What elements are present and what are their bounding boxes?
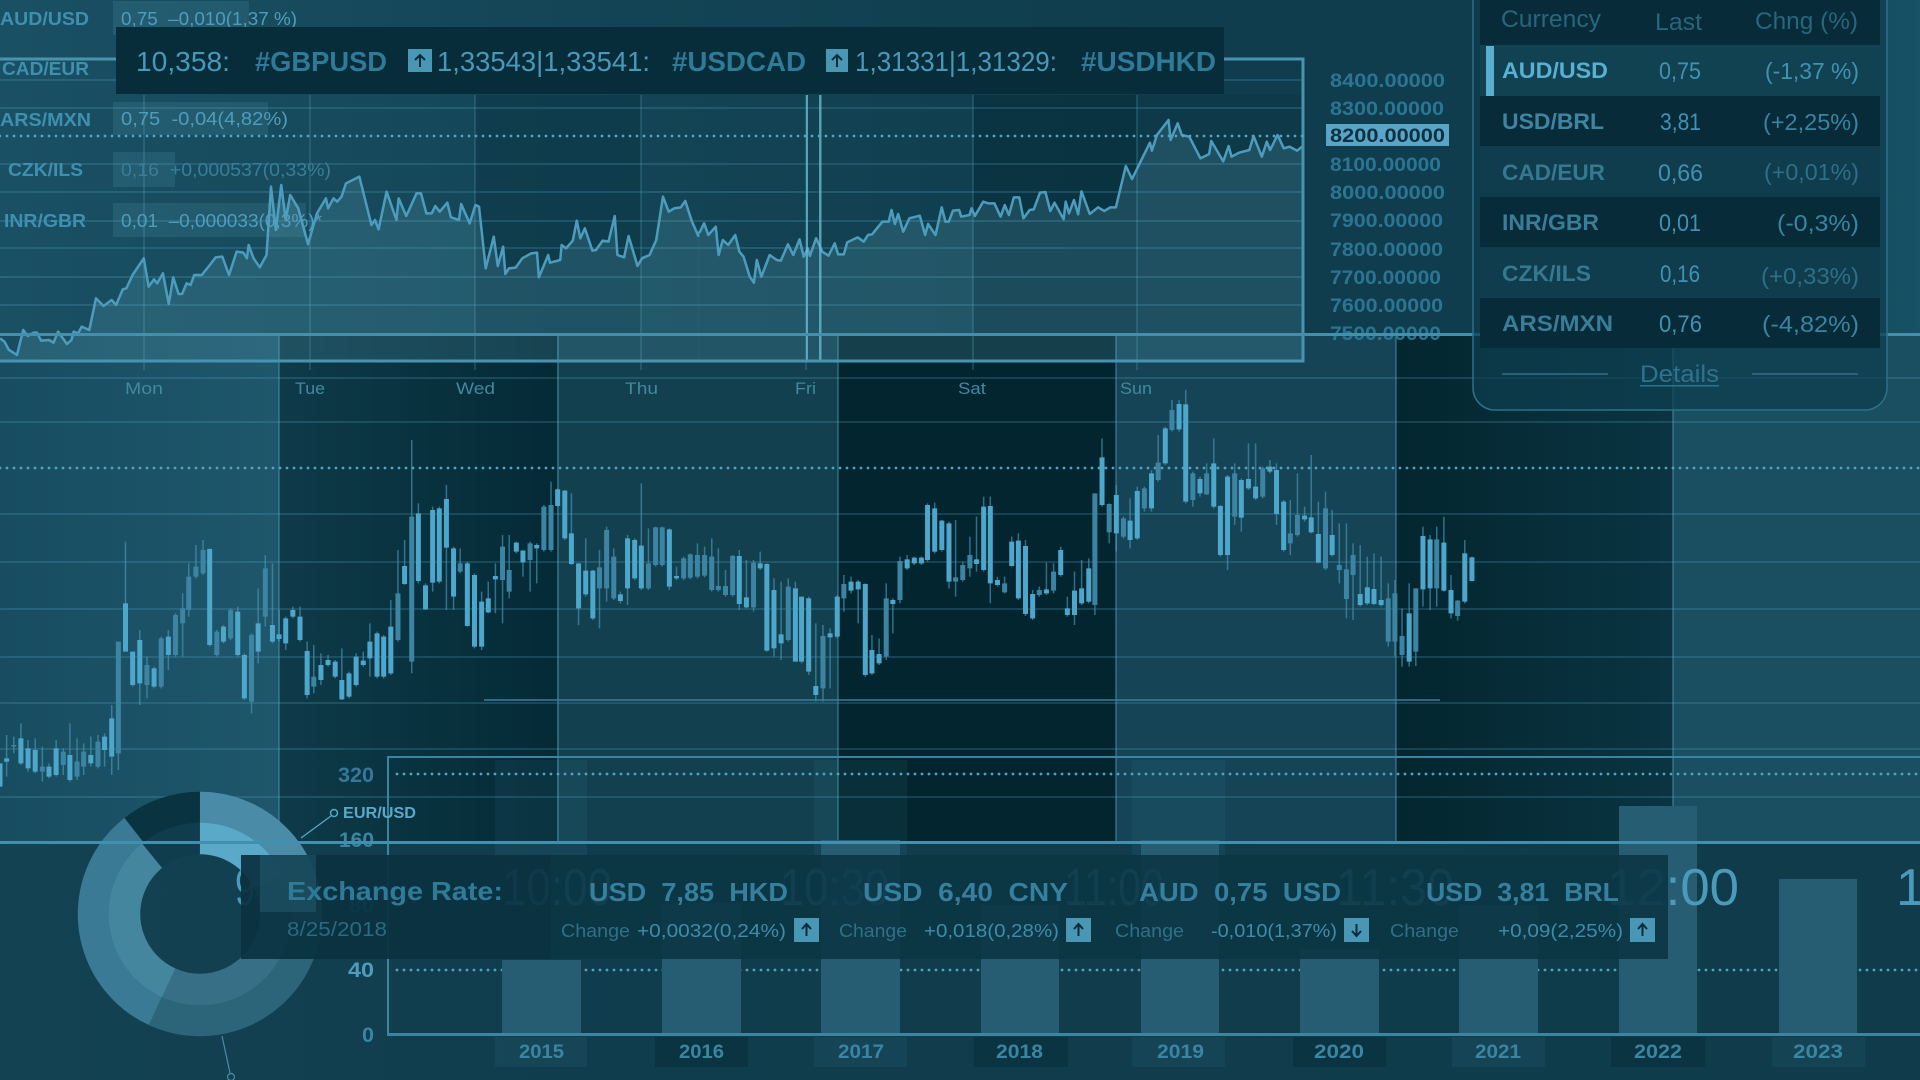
bar chart y axis: 320 [338, 764, 374, 787]
rate: AUD USD [1115, 877, 1369, 942]
y axis labels: line chart: 7900.00000 [1330, 210, 1443, 232]
ticker bar: 1,31331|1,31329: [855, 46, 1057, 77]
bar chart year labels: 2019 [1157, 1042, 1204, 1063]
day axis labels: Sun [1120, 379, 1152, 398]
day axis labels: Fri [795, 379, 816, 398]
rate: USD CNY: Change [839, 921, 907, 941]
exchange rate panel [241, 855, 1668, 959]
day axis labels [125, 379, 1152, 398]
rate: AUD USD: AUD 0,75 USD [1139, 877, 1341, 907]
rate: USD BRL: +0,09(2,25%) [1498, 921, 1623, 941]
rate: USD BRL: Change [1390, 921, 1459, 941]
left currency quote list: 0,75 -0,04(4,82%) [121, 108, 288, 129]
row: INR/GBR: 0,01 [1659, 210, 1701, 237]
bar chart year labels: 2018 [996, 1042, 1043, 1063]
ticker bar: 10,358: [136, 46, 230, 77]
ticker bar: #USDCAD [672, 46, 806, 77]
left currency quote list: CAD/EUR [2, 58, 89, 79]
icon: up arrow [826, 49, 848, 72]
rate: USD HKD: USD 7,85 HKD [589, 877, 788, 907]
ticker bar [116, 27, 1224, 94]
rate: USD BRL [1390, 877, 1655, 942]
row: CZK/ILS: 0,16 [1660, 261, 1700, 288]
ghost time axis labels: 11:00 [1064, 859, 1164, 917]
donut label: EUR/USD [301, 805, 416, 838]
row: AUD/USD [1502, 58, 1859, 85]
row: ARS/MXN [1502, 311, 1859, 338]
rate: USD HKD: +0,0032(0,24%) [637, 921, 786, 941]
left currency quote list: 0,75 –0,010(1,37 %) [121, 8, 297, 29]
bar chart [338, 757, 1920, 1067]
ghost time axis labels [235, 859, 1920, 917]
bar chart y axis: 0 [362, 1024, 374, 1047]
row: USD/BRL: 3,81 [1660, 109, 1701, 136]
bar chart y axis: 160 [339, 829, 374, 852]
horizontal rules [0, 333, 1920, 844]
faint bar shadows in bar chart [495, 760, 1865, 1067]
table rows [1480, 0, 1880, 348]
day axis labels: Tue [295, 379, 325, 398]
candlestick baseline [484, 699, 1440, 701]
rate: USD HKD [561, 877, 819, 942]
line chart: weekly rate [0, 120, 1303, 361]
row: CZK/ILS: (+0,33%) [1761, 263, 1859, 289]
panel: currency table [1473, 0, 1887, 410]
left currency quote list: CZK/ILS [8, 159, 83, 180]
left currency quote list: AUD/USD [0, 8, 89, 29]
bar chart year labels: 2021 [1475, 1042, 1521, 1063]
bar chart year labels: 2015 [519, 1042, 564, 1063]
row: CZK/ILS [1502, 261, 1859, 289]
line chart cursor [806, 95, 822, 360]
bar chart year labels [519, 1037, 1843, 1067]
left currency quote list: 0,01 –0,000033(0,3%)* [121, 210, 322, 231]
row: INR/GBR: (-0,3%) [1777, 210, 1859, 236]
rate: USD HKD: Change [561, 921, 630, 941]
donut lower leader [222, 1036, 234, 1080]
dotted reference lines [0, 136, 1920, 970]
day axis labels: Sat [958, 379, 986, 398]
left currency quote list: ARS/MXN [0, 109, 91, 130]
bar chart y axis [338, 764, 374, 1047]
y axis labels: line chart: 8400.00000 [1330, 70, 1445, 92]
ticker bar: #GBPUSD [255, 46, 387, 77]
row: INR/GBR [1502, 210, 1859, 237]
rate: USD BRL: USD 3,81 BRL [1426, 877, 1619, 907]
row: ARS/MXN: (-4,82%) [1762, 311, 1859, 337]
day axis labels: Thu [625, 379, 658, 398]
rate: AUD USD: Change [1115, 921, 1184, 941]
ticker bar: #USDHKD [1081, 46, 1216, 77]
ghost time axis labels: 10:30 [780, 859, 889, 917]
ghost time axis labels: 9 [235, 859, 255, 917]
ghost time axis labels: 10:00 [502, 859, 612, 917]
row: USD/BRL: USD/BRL [1502, 109, 1604, 134]
y axis labels: line chart [1326, 70, 1449, 345]
row: CAD/EUR: 0,66 [1658, 160, 1703, 187]
row: ARS/MXN: ARS/MXN [1502, 311, 1613, 336]
candlestick chart [0, 390, 1472, 787]
ghost time axis labels: 11:30 [1336, 859, 1454, 917]
rate: USD CNY: +0,018(0,28%) [924, 921, 1059, 941]
y axis labels: line chart: 8200.00000 [1330, 125, 1445, 147]
left currency quote list: INR/GBR [4, 210, 86, 231]
left currency quote list [0, 1, 331, 237]
row: CAD/EUR: CAD/EUR [1502, 160, 1605, 185]
table header [1501, 6, 1858, 36]
ghost time axis labels: 12:00 [1607, 859, 1739, 917]
bar chart year labels: 2023 [1793, 1042, 1843, 1063]
y axis labels: line chart: 8300.00000 [1330, 98, 1444, 120]
bar chart year labels: 2022 [1634, 1042, 1682, 1063]
y axis labels: line chart: 8100.00000 [1330, 154, 1441, 176]
bar chart year labels: 2016 [679, 1042, 724, 1063]
day axis labels: Mon [125, 379, 163, 398]
row: AUD/USD: (-1,37 %) [1765, 58, 1859, 84]
bar chart y axis: 40 [348, 959, 374, 982]
ticker bar: 1,33543|1,33541: [437, 46, 650, 77]
table header: Currency [1501, 6, 1601, 33]
row: USD/BRL: (+2,25%) [1763, 109, 1859, 135]
donut chart [51, 765, 416, 1080]
exchange rate heading [287, 876, 503, 941]
rate: USD CNY: USD 6,40 CNY [863, 877, 1068, 907]
table header: Chng (%) [1755, 8, 1858, 35]
icon: up arrow [408, 49, 432, 72]
rate: USD CNY [839, 877, 1091, 942]
bar chart year labels: 2020 [1314, 1042, 1364, 1063]
exchange rate heading: 8/25/2018 [287, 919, 387, 941]
row: AUD/USD: 0,75 [1659, 58, 1701, 85]
bar chart year labels: 2017 [838, 1042, 884, 1063]
day axis labels: Wed [456, 379, 495, 398]
row: USD/BRL [1502, 109, 1859, 136]
details link: Details [1640, 361, 1719, 388]
donut label: EUR/USD: EUR/USD [343, 805, 416, 822]
y axis labels: line chart: 7700.00000 [1330, 267, 1441, 289]
bar chart y axis: 80 [349, 894, 374, 917]
row: ARS/MXN: 0,76 [1659, 311, 1702, 338]
row: CAD/EUR: (+0,01%) [1764, 159, 1859, 185]
vertical market session bands [0, 334, 1920, 842]
row: CAD/EUR [1502, 159, 1859, 187]
y axis labels: line chart: 8000.00000 [1330, 182, 1445, 204]
y axis labels: line chart: 7500.00000 [1330, 323, 1441, 345]
row: AUD/USD: AUD/USD [1502, 58, 1608, 83]
row: CZK/ILS: CZK/ILS [1502, 261, 1591, 286]
y axis labels: line chart: 7600.00000 [1330, 295, 1443, 317]
y axis labels: line chart: 7800.00000 [1330, 239, 1443, 261]
exchange rate heading: Exchange Rate: [287, 876, 503, 906]
line chart frame [0, 59, 1303, 361]
row: INR/GBR: INR/GBR [1502, 210, 1599, 235]
left currency quote list: 0,16 +0,000537(0,33%) [121, 159, 331, 180]
table header: Last [1655, 9, 1702, 36]
rate: AUD USD: -0,010(1,37%) [1211, 921, 1337, 941]
